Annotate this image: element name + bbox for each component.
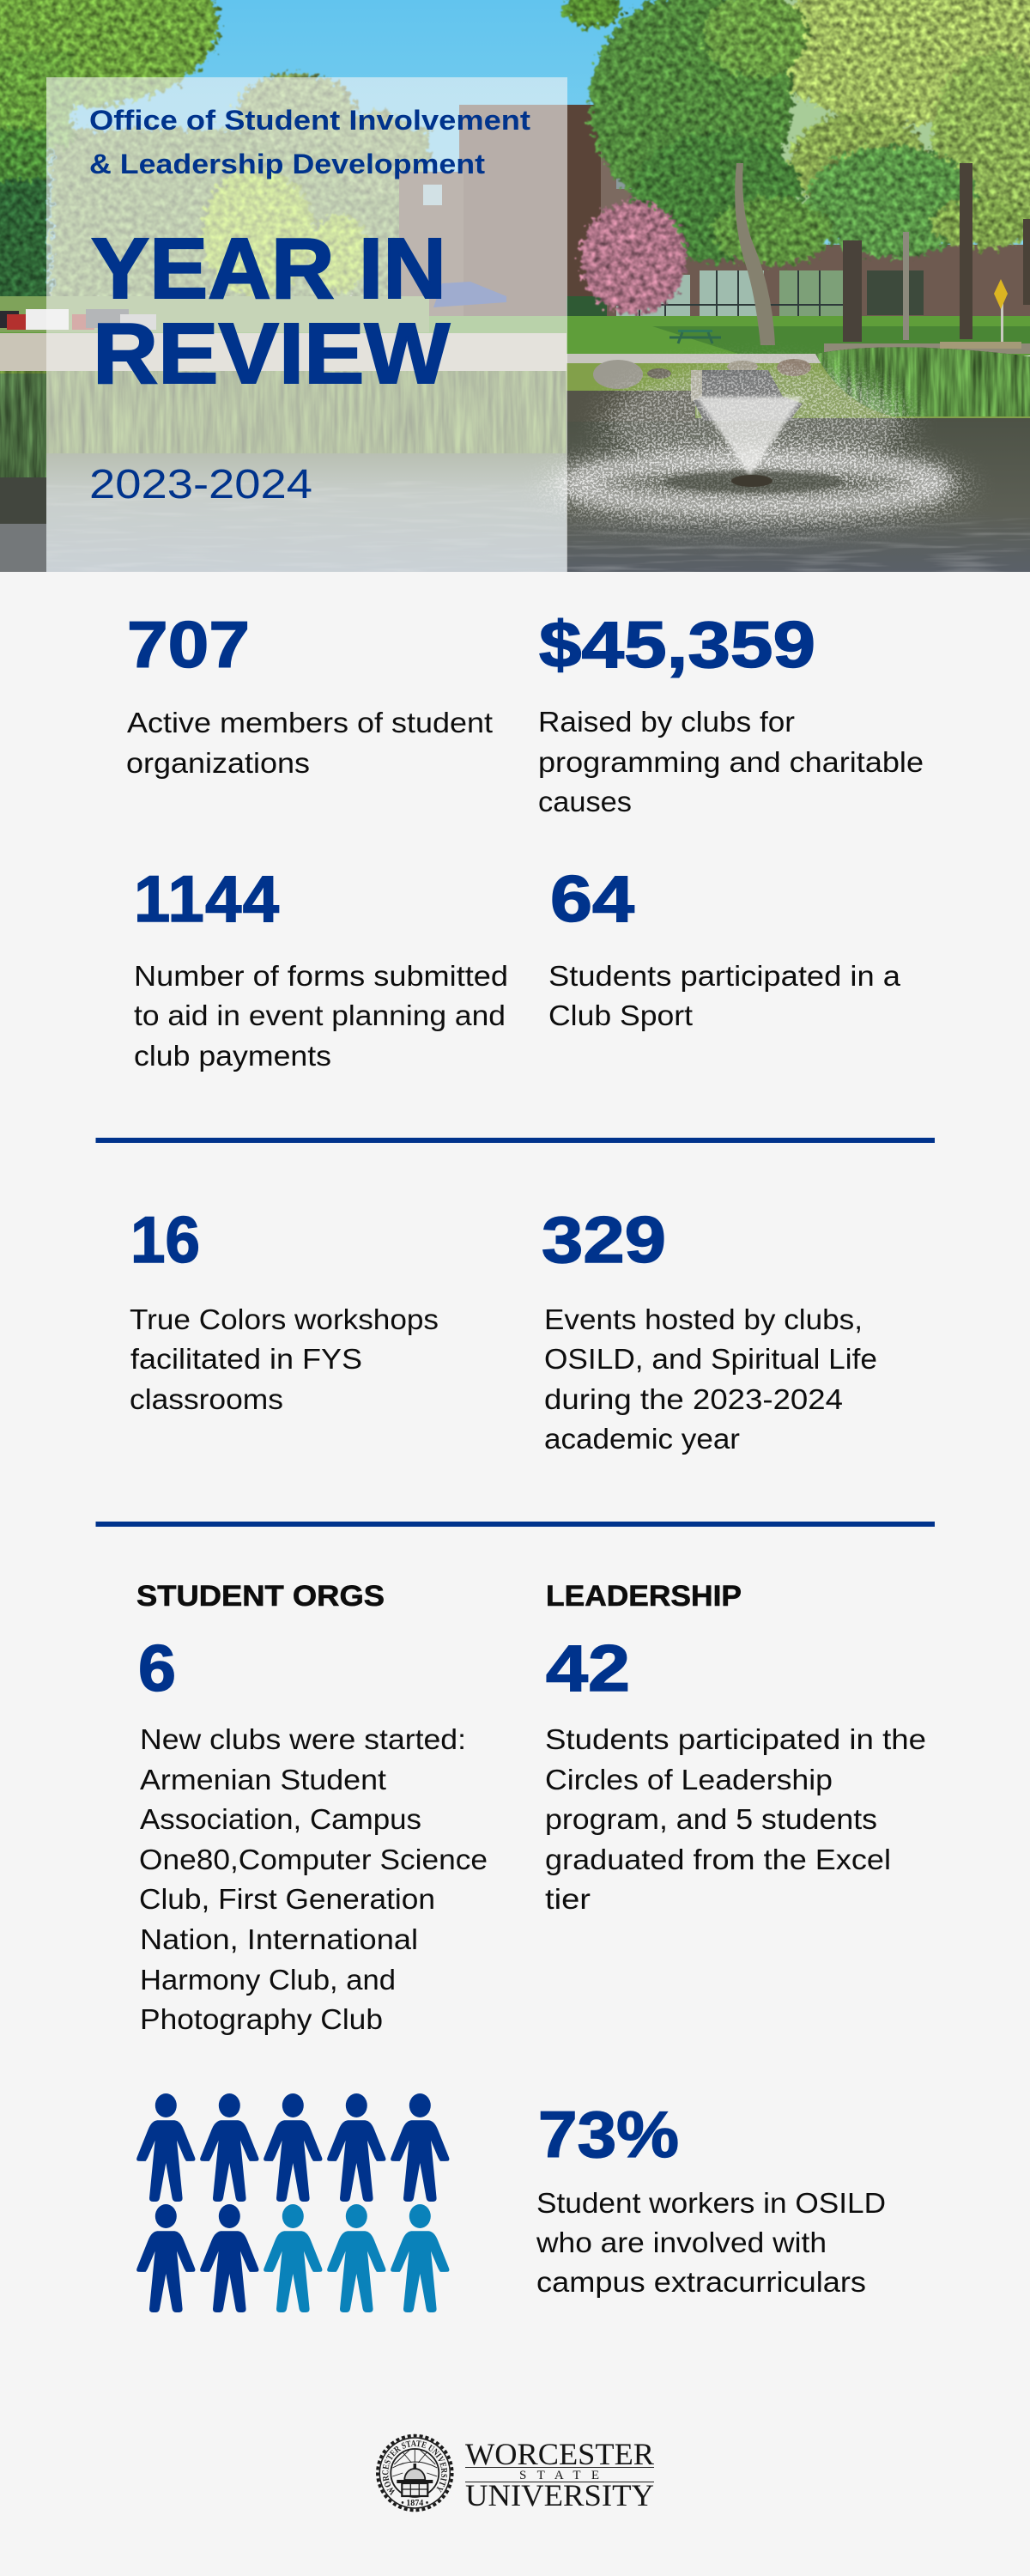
description: during the 2023-2024 (544, 1383, 843, 1415)
description: Harmony Club, and (140, 1964, 396, 1996)
description (536, 2187, 886, 2298)
description: Club Sport (548, 999, 693, 1031)
description: who are involved with (536, 2227, 827, 2258)
description: One80,Computer Science (139, 1844, 488, 1875)
office name (89, 105, 530, 179)
stat: $45,359 raised (538, 609, 924, 817)
office name: Office of Student Involvement (89, 105, 530, 136)
stat: 707 active members (126, 609, 493, 779)
number: 1144 (134, 863, 279, 936)
description: Association, Campus (140, 1803, 421, 1835)
reeds (815, 347, 1030, 416)
icon: university seal: WORCESTER STATE UNIVERSITY (382, 2440, 448, 2495)
description (130, 1303, 439, 1415)
number: 329 (542, 1204, 666, 1277)
description: Number of forms submitted (134, 960, 508, 992)
icon: university seal: • 1874 • (401, 2499, 429, 2508)
description (545, 1723, 926, 1915)
description: club payments (134, 1040, 331, 1072)
stat: 16 workshops (130, 1204, 439, 1415)
rocks and shoreline (566, 391, 695, 418)
stat: 73% student workers (536, 2099, 886, 2298)
description: academic year (544, 1423, 740, 1455)
pictogram: 7 of 10 people highlighted (136, 2093, 449, 2312)
description: organizations (126, 747, 310, 779)
icon: university seal (376, 2433, 454, 2512)
description: Club, First Generation (139, 1883, 435, 1915)
number: 707 (127, 609, 250, 682)
office name: & Leadership Development (89, 149, 485, 179)
number: 64 (550, 863, 634, 936)
ground floor windows (616, 270, 924, 318)
description: graduated from the Excel (545, 1844, 891, 1875)
description: Student workers in OSILD (536, 2187, 886, 2219)
description: Active members of student (127, 707, 493, 738)
description (134, 960, 508, 1072)
pond (46, 453, 566, 572)
description: causes (538, 786, 632, 817)
description (139, 1723, 488, 2035)
heading: LEADERSHIP (546, 1580, 742, 1613)
wordmark (465, 2437, 654, 2512)
description: Photography Club (140, 2003, 383, 2035)
description: Events hosted by clubs, (544, 1303, 863, 1335)
description: Raised by clubs for (538, 706, 795, 738)
description (548, 960, 901, 1031)
number: $45,359 (539, 609, 815, 682)
number: 6 (138, 1632, 176, 1705)
description: Students participated in the (545, 1723, 926, 1755)
road sign (994, 279, 1008, 309)
description: classrooms (130, 1383, 283, 1415)
description: program, and 5 students (545, 1803, 877, 1835)
description: campus extracurriculars (536, 2266, 866, 2298)
main title: REVIEW (93, 306, 451, 402)
fountain spray (536, 365, 974, 531)
stat: 329 events (542, 1204, 877, 1455)
section: leadership (545, 1580, 926, 1915)
wordmark: STATE (519, 2469, 599, 2482)
heading: STUDENT ORGS (136, 1580, 385, 1613)
number: 16 (130, 1204, 200, 1277)
header titles (89, 105, 530, 507)
description: Armenian Student (140, 1764, 386, 1795)
stat: 1144 forms (134, 863, 508, 1072)
description (538, 706, 924, 817)
description (544, 1303, 877, 1455)
description (126, 707, 493, 779)
description: True Colors workshops (130, 1303, 439, 1335)
header photo: campus pond and fountain (0, 0, 1030, 572)
description: OSILD, and Spiritual Life (544, 1343, 877, 1375)
wordmark: WORCESTER (465, 2437, 654, 2471)
university logo (376, 2433, 654, 2512)
stat: 64 club sport (548, 863, 901, 1031)
description: Students participated in a (548, 960, 901, 992)
section: student orgs (136, 1580, 488, 2035)
number: 42 (546, 1632, 630, 1705)
academic year: 2023-2024 (89, 462, 312, 507)
description: tier (545, 1883, 591, 1915)
number: 73% (538, 2099, 679, 2172)
description: programming and charitable (538, 746, 924, 778)
description: facilitated in FYS (130, 1343, 362, 1375)
main title: YEAR IN (91, 221, 446, 317)
wordmark: UNIVERSITY (465, 2478, 654, 2512)
description: Circles of Leadership (545, 1764, 833, 1795)
translucent title panel (46, 77, 567, 572)
cars and left side of campus (0, 296, 429, 332)
description: New clubs were started: (140, 1723, 466, 1755)
main title (91, 221, 451, 402)
description: to aid in event planning and (134, 999, 506, 1031)
description: Nation, International (140, 1923, 418, 1955)
